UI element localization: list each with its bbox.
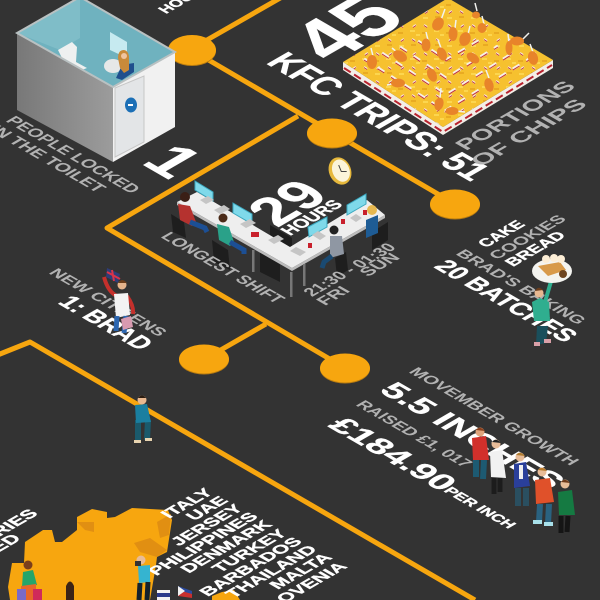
- word: hours: HOURS: [276, 197, 347, 238]
- label: shift times: SUN: [355, 250, 404, 279]
- list of countries: UAE: [181, 494, 232, 523]
- label: portions of chips: [450, 78, 593, 170]
- label: movember growth: 5.5 INCHES: [372, 378, 572, 494]
- label: Brad's baking: BRAD'S BAKING: [452, 247, 589, 327]
- illustration: toilet cubicle: [17, 0, 175, 162]
- icon: shopping bag: [121, 316, 133, 330]
- person: green top: [558, 480, 575, 533]
- list of countries: DENMARK: [176, 518, 276, 575]
- person: red top: [472, 428, 489, 479]
- icon: toilet bowl: [104, 59, 122, 73]
- label: shift times: 21:30 - 01:30: [299, 240, 400, 299]
- label: Brad's baking: BREAD: [502, 229, 570, 269]
- list of countries: [144, 486, 351, 600]
- label: 29 hours: [171, 171, 388, 297]
- worker: teal shirt: [217, 214, 244, 254]
- node: toilet junction: [168, 35, 216, 66]
- icon: wall clock: [325, 154, 355, 188]
- node: citizens junction: [179, 344, 229, 374]
- list of countries: THAILAND: [221, 543, 321, 600]
- label: movember growth: MOVEMBER GROWTH: [405, 365, 582, 468]
- group of five people: [472, 428, 575, 533]
- monitors: [195, 181, 366, 237]
- node: baking junction: [430, 190, 480, 220]
- red cups: [251, 210, 367, 248]
- door: [115, 76, 144, 157]
- figure: man in blue: [134, 396, 152, 443]
- label: longest shift: LONGEST SHIFT: [157, 229, 290, 306]
- icon: locked-in woman: [116, 50, 134, 80]
- label: Brad's baking: [428, 213, 589, 346]
- illustration: orange map: [8, 508, 240, 600]
- list of countries: MALTA: [265, 551, 336, 592]
- list of countries: JERSEY: [166, 502, 247, 548]
- person: blue jacket: [514, 452, 530, 506]
- label: movember growth: £184.90: [321, 413, 464, 496]
- label: new citizens: NEW CITIZENS: [45, 266, 170, 339]
- label: new citizens: 1: BRAD: [52, 292, 159, 354]
- icon: toilet roll: [58, 42, 87, 70]
- list of countries: BARBADOS: [195, 535, 306, 599]
- person: white coat: [490, 440, 506, 494]
- figure: woman from behind: [66, 582, 74, 600]
- list of countries: ITALY: [156, 486, 217, 521]
- figure: photographer: [135, 556, 150, 600]
- label: movember growth: PER INCH: [440, 484, 520, 531]
- label: portions of chips: PORTIONS: [450, 78, 581, 154]
- layers of chip boxes: [364, 40, 534, 112]
- icon: flag of the Philippines: [178, 586, 192, 598]
- label: Brad's baking: 20 BATCHES: [428, 256, 584, 346]
- worker: grey shirt: [322, 226, 344, 268]
- list of countries: TURKEY: [207, 527, 291, 575]
- label: shift times: FRI: [312, 283, 354, 308]
- chairs: [171, 214, 388, 282]
- figure: baker with plate: [532, 254, 572, 346]
- chicken drumsticks: [371, 3, 533, 112]
- icon: plate of baking: [532, 254, 572, 283]
- illustration: pyramid of chips: [343, 0, 553, 135]
- connector lines: [0, 0, 475, 600]
- list of countries: PHILIPPINES: [144, 510, 262, 578]
- figure: woman with shopping bags: [17, 560, 42, 600]
- label: KFC trips 51: KFC TRIPS: 51: [258, 46, 500, 186]
- label: movember growth: [321, 365, 582, 531]
- illustration: office desks: [171, 181, 388, 297]
- label: Brad's baking: COOKIES: [486, 213, 571, 262]
- desk legs: [252, 250, 306, 297]
- number: 29: 29: [233, 171, 341, 234]
- node: movember junction: [320, 354, 370, 384]
- number: 1: 1: [128, 135, 217, 187]
- worker: red shirt: [178, 192, 207, 232]
- icon: flag of Thailand: [157, 590, 170, 600]
- node: KFC junction: [307, 118, 357, 148]
- label: movember growth: RAISED £1, 017: [352, 398, 475, 470]
- label: portions of chips: OF CHIPS: [465, 96, 593, 170]
- label: new citizens: [45, 266, 170, 354]
- worker: blonde woman: [366, 205, 378, 238]
- icon: door sign: [125, 98, 137, 112]
- label: people locked in the toilet: PEOPLE LOCKED: [2, 113, 144, 196]
- label: Brad's baking: CAKE: [475, 218, 530, 250]
- figure: man with union flag: [104, 268, 133, 333]
- keyboards and paper: [200, 196, 362, 256]
- person: orange top: [533, 468, 554, 526]
